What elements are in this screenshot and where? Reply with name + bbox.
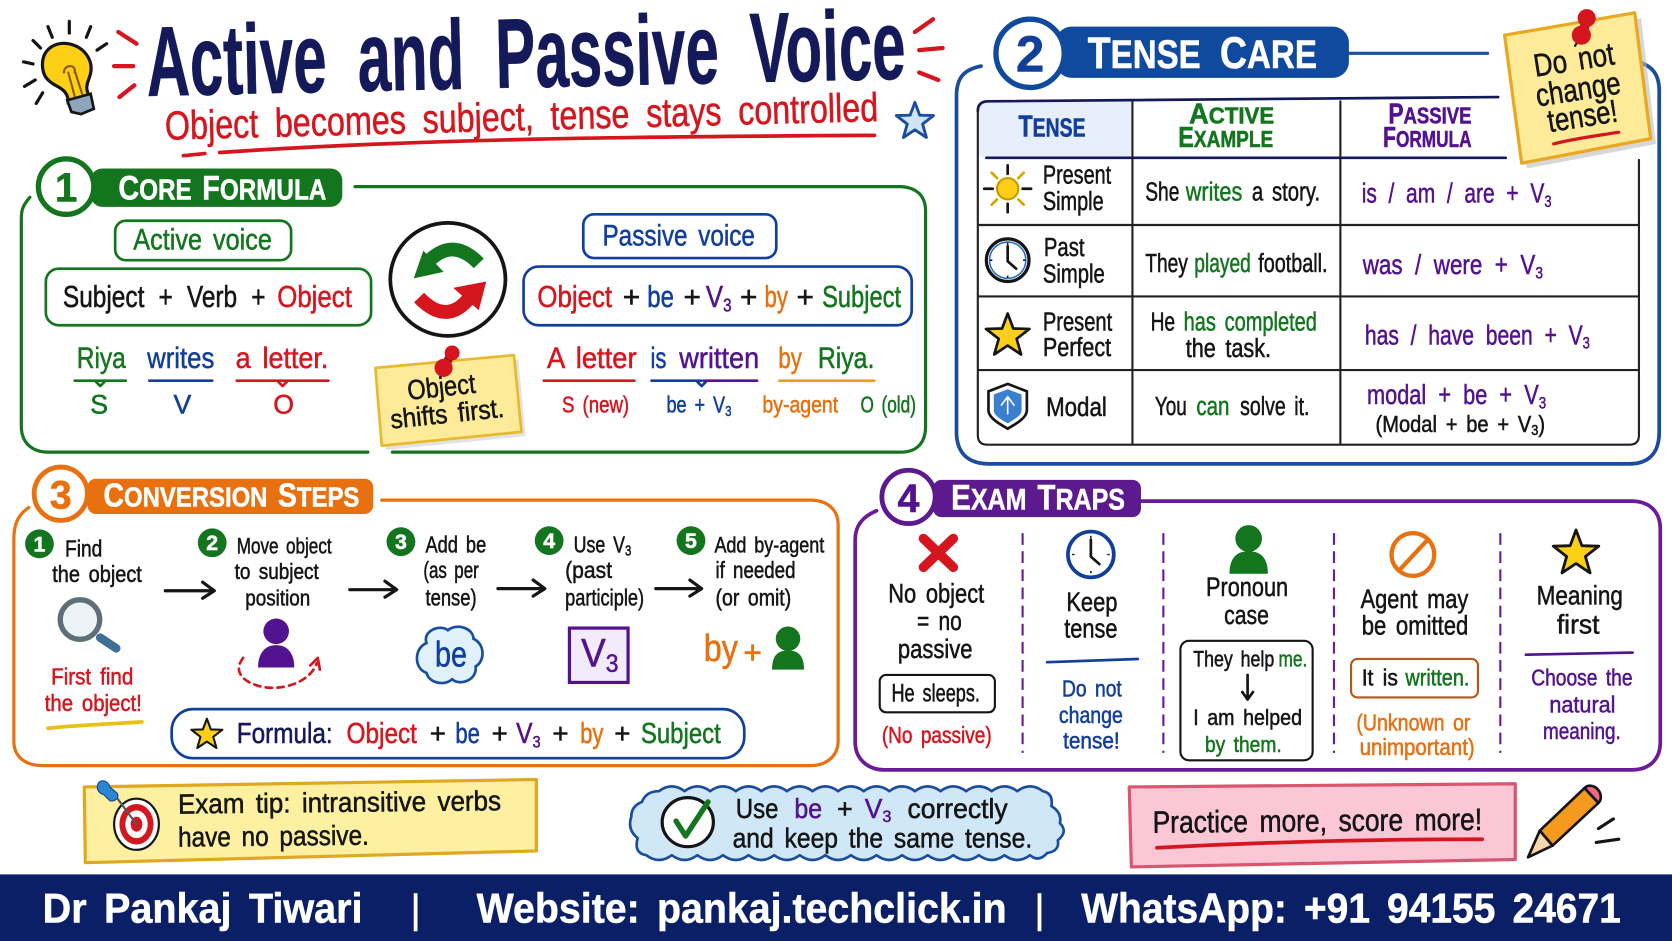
row: modal: You [1155, 393, 1187, 421]
trap: meaning first: natural [1549, 691, 1615, 717]
formula bar: + [614, 718, 630, 749]
step 2: move object: to subject [235, 559, 319, 584]
trap: meaning first: meaning. [1543, 718, 1621, 744]
row: modal: 3 [1531, 422, 1538, 439]
example: passive sentence: A letter [547, 342, 637, 375]
row: past simple: They [1145, 250, 1188, 278]
row: present simple: She [1145, 178, 1179, 206]
trap: pronoun case: I am helped [1193, 705, 1302, 730]
icon: V3 box: V [581, 631, 607, 675]
callout: practice more [1129, 784, 1515, 867]
trap: keep tense: tense [1064, 614, 1118, 644]
row: modal: (Modal + be + V [1376, 411, 1557, 437]
formula: passive: + [623, 281, 640, 314]
step 1: find the object: the object! [45, 690, 142, 716]
formula bar: 3 [533, 732, 541, 751]
trap: agent may be omitted: Agent may [1361, 584, 1469, 614]
row: present perfect: the task. [1186, 335, 1271, 363]
formula: passive: + [684, 281, 701, 314]
callout: use be + V3: 3 [882, 807, 891, 826]
label: passive voice [583, 214, 776, 258]
label: passive voice: Passive voice [602, 219, 755, 252]
formula: passive: + [797, 281, 814, 314]
sticky note: object shifts first: Object [406, 368, 477, 406]
subtitle underline [183, 135, 874, 156]
panel: exam traps [855, 470, 1660, 770]
callout: use be + V3: correctly [907, 793, 1008, 824]
table header: ACTIVE [1189, 99, 1274, 131]
example: passive sentence [544, 342, 916, 420]
trap: agent may be omitted [1351, 533, 1478, 760]
row: present perfect: Perfect [1043, 334, 1111, 362]
example: active sentence [75, 342, 328, 420]
trap: no object [880, 538, 995, 748]
badge: section 2 heading: TENSE CARE [1088, 28, 1317, 78]
step 4: use V3 [535, 526, 644, 682]
footer bar: WhatsApp: +91 94155 24671 [1081, 884, 1621, 931]
sticky note: object shifts first: shifts first. [389, 393, 505, 435]
row: present simple: writes [1185, 178, 1242, 206]
step 3: add be: 3 [395, 530, 407, 554]
formula: passive: + [740, 281, 757, 314]
step 3: add be: Add be [425, 531, 486, 557]
step 3: add be: (as per [423, 557, 479, 583]
row: past simple: Simple [1043, 261, 1105, 289]
sticky note: object shifts first [375, 345, 526, 450]
formula: active: Subject + Verb + [63, 279, 266, 314]
arrow: step 4 to 5 [656, 580, 702, 596]
example: passive sentence: S (new) [562, 392, 629, 418]
trap: agent may be omitted: written. [1405, 665, 1469, 691]
row: present perfect: Present [1043, 309, 1112, 337]
step 2: move object: 2 [206, 531, 218, 555]
icon: V3 box [569, 628, 628, 682]
example: active sentence: V [173, 390, 191, 420]
row: present perfect: 3 [1583, 334, 1590, 353]
trap: no object: No object [888, 578, 985, 608]
formula: active [46, 269, 371, 325]
example: passive sentence: be + V [666, 392, 742, 418]
trap: no object: (No passive) [882, 722, 992, 748]
step 1: find the object: the object [52, 561, 142, 587]
row: modal: solve it. [1240, 393, 1309, 421]
formula bar: Subject [641, 718, 721, 750]
trap: pronoun case [1180, 525, 1313, 760]
badge: section 2 heading [996, 19, 1349, 87]
row: modal: modal + be + V [1367, 379, 1586, 410]
row: present simple: is / am / are + V [1362, 178, 1603, 209]
trap: agent may be omitted: unimportant) [1360, 734, 1475, 760]
row: past simple: Past [1044, 234, 1084, 262]
step 2: move object: Move object [237, 533, 332, 558]
step 5: add by-agent [677, 526, 825, 670]
trap: pronoun case: Pronoun [1206, 572, 1288, 602]
arrow: step 2 to 3 [350, 581, 397, 597]
trap: pronoun case: case [1224, 600, 1269, 630]
row: past simple: 3 [1535, 263, 1543, 282]
badge: section 1 heading: CORE FORMULA [118, 169, 326, 207]
badge: section 4 heading: EXAM TRAPS [951, 479, 1125, 518]
formula bar: Formula: [237, 718, 333, 750]
step 1: find the object: First find [51, 664, 133, 690]
step 1: find the object: Find [65, 536, 102, 562]
sticky note: do not change tense [1505, 9, 1656, 168]
badge: section 3 heading [34, 467, 373, 520]
callout: exam tip: have no passive. [178, 820, 369, 853]
icon: blue star [896, 102, 934, 137]
footer bar: Website: pankaj.techclick.in [477, 884, 1007, 931]
icon: pencil [1528, 786, 1619, 857]
example: passive sentence: written [678, 342, 759, 375]
trap: keep tense: Do not [1062, 675, 1122, 701]
row: modal: ) [1538, 411, 1545, 437]
badge: section 4 heading: 4 [898, 477, 920, 521]
formula bar: + [492, 718, 508, 749]
callout: exam tip: Exam tip: intransitive verbs [178, 785, 501, 820]
step 2: move object: position [245, 586, 310, 611]
trap: keep tense: Keep [1066, 587, 1118, 617]
formula bar [172, 709, 744, 758]
trap: pronoun case: They help [1193, 646, 1274, 671]
callout: use be + V3: be [794, 793, 822, 824]
icon: red pin [1572, 9, 1596, 46]
badge: section 1 heading [38, 159, 342, 214]
trap: meaning first: Meaning [1537, 581, 1623, 611]
step 1: find the object: 1 [34, 532, 46, 556]
trap: meaning first [1526, 530, 1633, 744]
formula: passive: be [647, 279, 674, 314]
sticky note: do not change tense: tense! [1545, 93, 1620, 139]
trap: agent may be omitted: (Unknown or [1356, 709, 1471, 735]
formula bar: + [430, 718, 446, 749]
trap: agent may be omitted: It is [1362, 665, 1398, 691]
formula bar: be [455, 718, 480, 750]
table header: FORMULA [1383, 122, 1472, 154]
row: present perfect: has / have been + V [1365, 319, 1651, 350]
callout: use be + V3 [630, 786, 1064, 860]
formula: active: Object [277, 279, 352, 314]
table header: EXAMPLE [1178, 122, 1273, 154]
row: present simple [984, 161, 1552, 216]
callout: use be + V3: Use [736, 793, 778, 824]
formula: passive: Subject [822, 279, 901, 314]
icon: magnifier [60, 600, 116, 648]
connector line [1349, 52, 1488, 55]
icon: by plus person: + [743, 634, 762, 670]
badge: section 2 heading: 2 [1016, 25, 1044, 82]
column dividers [1023, 533, 1500, 753]
arrow: step 1 to 2 [165, 582, 214, 598]
icon: be cloud: be [435, 633, 467, 674]
step 3: add be [387, 527, 486, 683]
row: present perfect [986, 309, 1590, 363]
row: past simple: played [1194, 250, 1251, 278]
icon: person moving [239, 618, 320, 688]
step 5: add by-agent: 5 [685, 529, 697, 553]
callout: exam tip [84, 779, 536, 863]
badge: section 1 heading: 1 [55, 165, 77, 211]
panel outline [14, 500, 838, 766]
trap: no object: He sleeps. [891, 681, 980, 708]
row: past simple [986, 234, 1543, 289]
badge: section 3 heading: 3 [50, 474, 72, 518]
subtitle: Object becomes subject, tense stays controlled [164, 84, 879, 149]
formula: passive: 3 [723, 295, 732, 315]
row: present perfect: has completed [1184, 309, 1317, 337]
trap: agent may be omitted: be omitted [1362, 610, 1468, 640]
formula: passive: V [706, 279, 727, 314]
table: tenses [978, 97, 1639, 445]
icon: V3 box: 3 [606, 651, 618, 678]
example: active sentence: writes [146, 342, 214, 375]
step 4: use V3: Use V [574, 531, 641, 557]
callout: use be + V3: + [837, 794, 853, 824]
formula: passive: Object [537, 279, 612, 314]
trap: keep tense: change [1059, 702, 1123, 728]
step 1: find the object [25, 529, 142, 728]
trap: no object: = no [917, 606, 962, 636]
example: active sentence: S [90, 390, 108, 420]
trap: keep tense [1047, 532, 1138, 754]
icon: by plus person [704, 626, 804, 670]
formula: passive [524, 267, 912, 325]
row: modal: Modal [1046, 392, 1107, 422]
sticky note: do not change tense: Do not [1531, 35, 1617, 84]
example: passive sentence: O (old) [861, 392, 916, 418]
icon: check mark [662, 798, 713, 847]
trap: meaning first: first [1557, 609, 1600, 639]
footer bar: | [1034, 887, 1045, 931]
panel: conversion steps [14, 467, 838, 766]
icon: be cloud [417, 627, 483, 683]
decoration: left red dashes [114, 32, 136, 97]
badge: section 3 heading: CONVERSION STEPS [103, 478, 359, 515]
table header [978, 97, 1506, 158]
callout: practice more: Practice more, score more! [1152, 802, 1482, 840]
icon: swap arrows [390, 223, 505, 336]
callout: use be + V3: and keep the same tense. [733, 823, 1032, 854]
table header: PASSIVE [1388, 99, 1472, 131]
step 4: use V3: 4 [543, 529, 555, 553]
formula bar: + [552, 718, 569, 749]
example: passive sentence: is [650, 342, 666, 375]
formula: passive: by [765, 279, 788, 314]
icon: light bulb [23, 21, 107, 114]
step 4: use V3: participle) [565, 585, 644, 611]
table grid [978, 101, 1639, 445]
icon: by plus person: by [704, 627, 739, 670]
example: active sentence: Riya [77, 342, 126, 375]
table header: TENSE [1018, 108, 1086, 143]
example: passive sentence: by [778, 342, 802, 375]
row: present simple: 3 [1544, 192, 1552, 211]
row: modal: can [1196, 393, 1229, 421]
example: passive sentence: by-agent [762, 392, 839, 418]
panel outline [21, 187, 926, 452]
icon: red pin [435, 345, 460, 377]
step 4: use V3: 3 [625, 543, 631, 560]
step 2: move object [198, 528, 332, 688]
example: active sentence: O [273, 390, 294, 420]
panel: core formula [21, 159, 926, 452]
trap: no object: passive [898, 634, 972, 664]
panel outline [956, 62, 1659, 464]
panel: tense care [956, 9, 1659, 464]
row: past simple: was / were + V [1363, 249, 1576, 280]
step 5: add by-agent: Add by-agent [714, 532, 825, 557]
row: present simple: a story. [1252, 178, 1320, 206]
example: passive sentence: 3 [725, 403, 731, 420]
trap: pronoun case: me. [1279, 646, 1307, 671]
label: active voice: Active voice [133, 224, 272, 257]
step 5: add by-agent: (or omit) [716, 585, 791, 611]
callout: use be + V3: V [865, 793, 883, 824]
row: present simple: Present [1043, 161, 1111, 189]
step 3: add be: tense) [425, 585, 477, 611]
row: past simple: football. [1258, 250, 1328, 278]
trap: pronoun case: by them. [1205, 732, 1282, 757]
trap: keep tense: tense! [1063, 728, 1120, 754]
step 5: add by-agent: if needed [716, 557, 795, 583]
formula bar: by [580, 718, 604, 750]
example: passive sentence: Riya. [818, 342, 874, 375]
trap: meaning first: Choose the [1531, 665, 1633, 691]
formula bar: V [516, 718, 535, 750]
decoration: right red dashes [915, 19, 943, 80]
formula bar: Object [347, 718, 417, 750]
row: modal [988, 379, 1546, 439]
row: present simple: Simple [1043, 188, 1104, 216]
example: active sentence: a letter. [236, 342, 328, 375]
badge: section 4 heading [882, 470, 1141, 524]
sticky note: do not change tense: change [1533, 65, 1623, 114]
icon: target with pin [97, 781, 159, 850]
row: modal: 3 [1539, 393, 1546, 412]
footer bar: Dr Pankaj Tiwari [43, 884, 363, 931]
panel outline [855, 501, 1660, 770]
footer bar: | [411, 887, 421, 931]
footer bar [0, 874, 1672, 941]
arrow: step 3 to 4 [498, 580, 545, 596]
row: present perfect: He [1151, 309, 1175, 337]
step 4: use V3: (past [565, 557, 613, 583]
